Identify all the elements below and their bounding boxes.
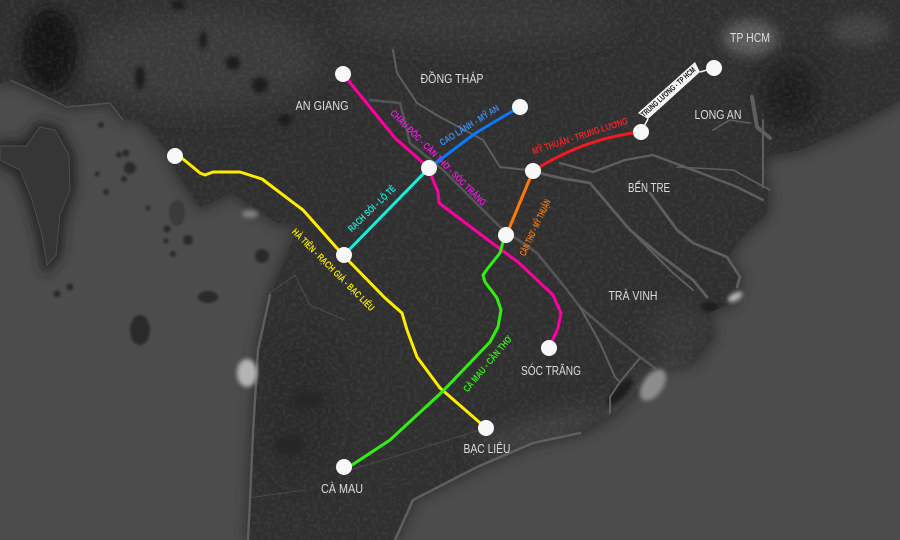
white mudflats bbox=[237, 210, 744, 405]
route: Ca Mau - Can Tho bbox=[344, 236, 515, 467]
route: Rach Soi - Lo Te: RẠCH SỎI - LỘ TẺ bbox=[345, 183, 398, 235]
route: Ha Tien - Rach Gia - Bac Lieu: HÀ TIÊN - RẠCH GIÁ - BẠC LIÊU bbox=[289, 226, 377, 314]
place labels: CÀ MAU bbox=[321, 481, 363, 496]
city nodes bbox=[167, 60, 722, 475]
route: My Thuan - Trung Luong: MỸ THUẬN - TRUNG LƯƠNG bbox=[531, 115, 629, 157]
place labels: LONG AN bbox=[694, 108, 742, 122]
route: Trung Luong - TP HCM: TRUNG LƯƠNG - TP HCM bbox=[639, 65, 698, 119]
route: Rach Soi - Lo Te bbox=[344, 168, 429, 255]
place labels: ĐỒNG THÁP bbox=[420, 71, 484, 86]
place labels: TRÀ VINH bbox=[608, 288, 658, 303]
lighter and darker land patches bbox=[80, 0, 818, 480]
rivers bbox=[10, 50, 770, 540]
island: Phu Quoc bbox=[0, 127, 70, 265]
dark delta water bbox=[604, 377, 635, 406]
route: Chau Doc - Can Tho - Soc Trang: CHÂU ĐỐC - CẦN THƠ - SÓC TRĂNG bbox=[388, 107, 489, 208]
route: Ca Mau - Can Tho: CÀ MAU - CẦN THƠ bbox=[461, 334, 515, 395]
route: Can Tho - My Thuan: CẦN THƠ - MỸ THUẬN bbox=[517, 197, 554, 258]
route: Ha Tien - Rach Gia - Bac Lieu bbox=[175, 156, 486, 428]
place labels: AN GIANG bbox=[296, 99, 348, 113]
route: Can Tho - My Thuan bbox=[506, 171, 554, 258]
place labels: SÓC TRĂNG bbox=[521, 363, 581, 378]
route: My Thuan - Trung Luong bbox=[531, 115, 641, 171]
route: Cao Lanh - My An: CAO LÃNH - MỸ AN bbox=[438, 103, 502, 149]
route: Trung Luong - TP HCM bbox=[638, 62, 714, 132]
city and large lake bbox=[22, 8, 890, 92]
small islands bbox=[54, 122, 269, 345]
route: Chau Doc - Can Tho - Soc Trang bbox=[343, 74, 561, 348]
place labels: BẾN TRE bbox=[628, 180, 670, 195]
place labels: TP HCM bbox=[730, 31, 770, 45]
place labels bbox=[296, 31, 770, 496]
route: Cao Lanh - My An bbox=[429, 103, 520, 168]
dark lakes bbox=[135, 0, 324, 455]
place labels: BẠC LIÊU bbox=[464, 441, 510, 456]
